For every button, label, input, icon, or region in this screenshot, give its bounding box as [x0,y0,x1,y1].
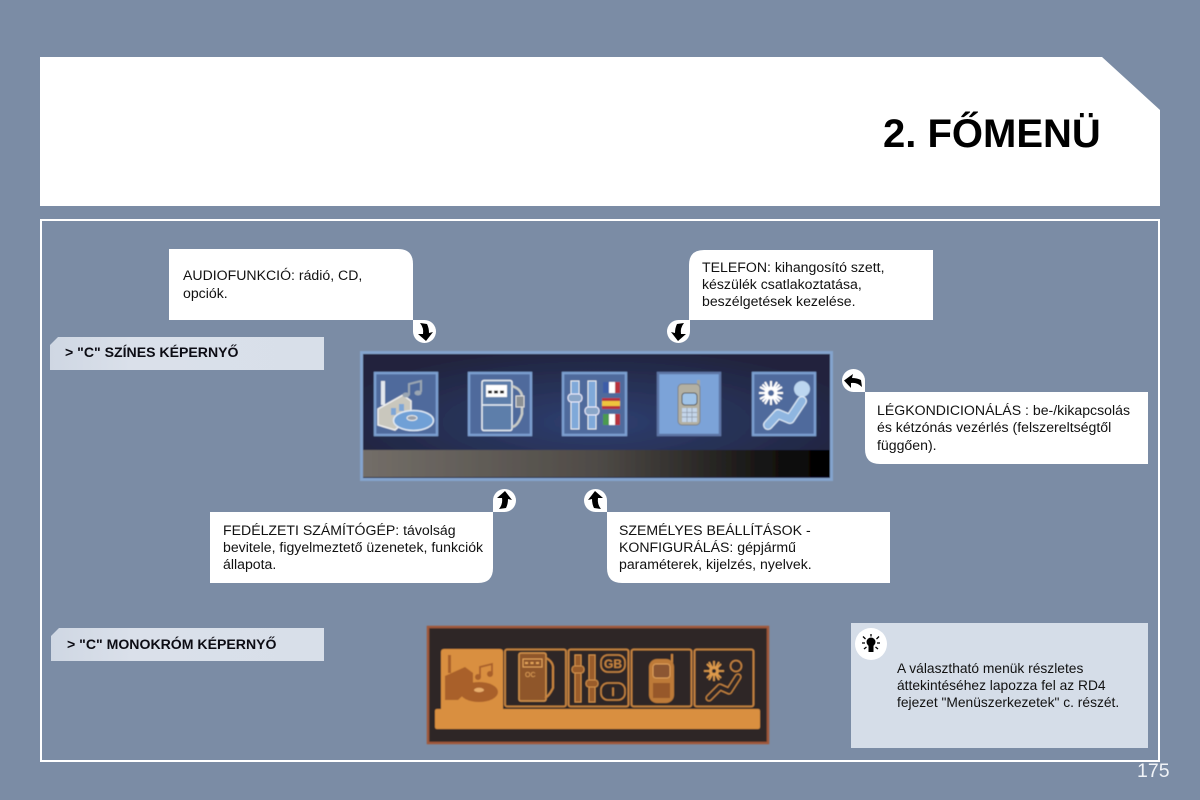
language tag: I: I [611,685,615,699]
callout: trip computer: bevitele, figyelmeztető üzenetek, funkciók [223,539,484,555]
note panel: fejezet "Menüszerkezetek" c. részét. [897,695,1119,710]
flag: Italy [603,414,620,425]
callout: trip computer: FEDÉLZETI SZÁMÍTÓGÉP: távolság [223,522,456,538]
icon: telephone selected [658,373,720,435]
callout: audio: opciók. [183,285,228,301]
icon: air conditioning [753,373,815,435]
callout: air conditioning: LÉGKONDICIONÁLÁS : be-/kikapcsolás [877,402,1130,418]
callout: telephone: készülék csatlakoztatása, [702,276,862,292]
callout: personal settings [584,489,890,583]
callout: air conditioning: függően). [877,437,937,453]
callout: personal settings: SZEMÉLYES BEÁLLÍTÁSOK - [619,522,811,538]
note panel [851,623,1148,748]
main content frame [41,220,1159,761]
label: colour screen: > "C" SZÍNES KÉPERNYŐ [65,343,239,360]
header panel [40,57,1160,206]
callout: telephone: beszélgetések kezelése. [702,293,856,309]
arrow: audio [413,320,436,343]
callout: personal settings: KONFIGURÁLÁS: gépjármű [619,539,796,555]
note panel: áttekintéséhez lapozza fel az RD4 [897,678,1106,693]
icon: settings mono [568,650,628,706]
callout: trip computer: állapota. [223,556,276,572]
title: 2. FŐMENÜ [883,110,1101,156]
flag: Spain [602,398,620,409]
label: monochrome screen: > "C" MONOKRÓM KÉPERNYŐ [67,635,277,652]
callout: telephone: TELEFON: kihangosító szett, [702,259,885,275]
icon: audio mono [445,655,498,702]
callout: air conditioning: és kétzónás vezérlés (felszereltségtől [877,419,1111,435]
label: monochrome screen [51,628,324,661]
callout: telephone [667,250,933,343]
callout: audio: AUDIOFUNKCIÓ: rádió, CD, [183,267,362,283]
flag: France [603,382,620,393]
page number: 175 [1137,760,1170,782]
icon: settings and flags [563,373,626,435]
label: colour screen [50,337,324,370]
icon: audio [375,373,437,435]
note panel: A választható menük részletes [897,661,1083,676]
icon: light bulb [855,628,887,660]
language tag: GB: GB [604,657,622,671]
icon: fuel mono: OC [525,672,536,679]
monochrome screen [428,627,768,743]
icon: telephone mono [632,650,692,706]
arrow: telephone [667,320,690,343]
callout: air conditioning [842,369,1148,464]
callout: audio [169,249,436,343]
colour screen [362,352,832,480]
callout: trip computer [210,489,516,583]
arrow: personal settings [584,489,607,512]
icon: fuel computer [469,373,531,435]
arrow: air conditioning [842,369,865,392]
icon: fuel mono [505,650,566,706]
callout: personal settings: paraméterek, kijelzés, nyelvek. [619,556,812,572]
arrow: trip computer [493,489,516,512]
icon: air conditioning mono [694,650,754,706]
